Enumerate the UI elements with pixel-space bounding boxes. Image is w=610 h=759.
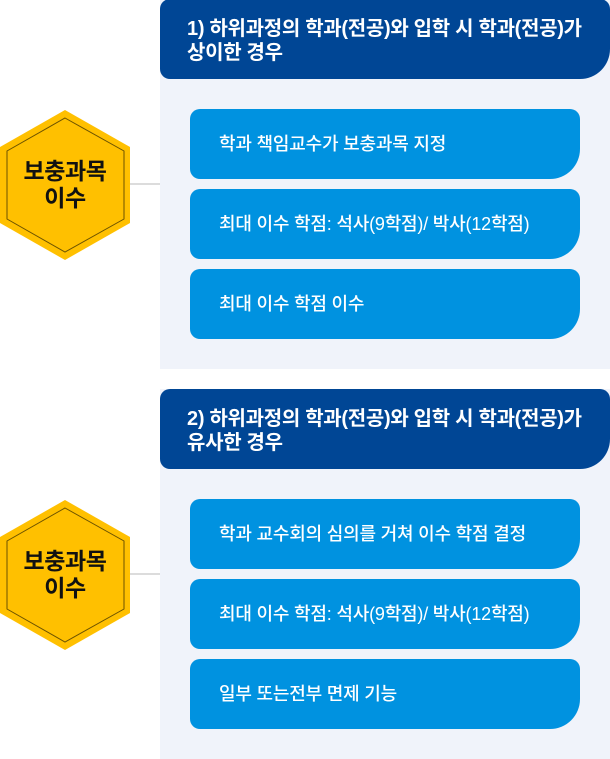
panel: section 2 background — [160, 389, 610, 759]
item: partial or full exemption: 일부 또는전부 면제 기능 — [219, 684, 397, 704]
item: max credit completion: 최대 이수 학점 이수 — [219, 294, 364, 314]
heading: section 1: 1) 하위과정의 학과(전공)와 입학 시 학과(전공)가 — [187, 18, 582, 40]
heading: section 2 — [160, 389, 610, 469]
icon: hexagon badge 2: 이수 — [44, 575, 86, 601]
icon: hexagon badge 1: 보충과목 — [23, 158, 107, 184]
item: max credits: 최대 이수 학점: 석사(9학점)/ 박사(12학점) — [219, 214, 529, 234]
icon: hexagon badge 2: 보충과목 — [23, 548, 107, 574]
item: partial or full exemption — [190, 659, 580, 729]
panel: section 1 background — [160, 0, 610, 369]
heading: section 1 — [160, 0, 610, 79]
item: max credits — [190, 189, 580, 259]
item: department committee — [190, 499, 580, 569]
item: max credits: 최대 이수 학점: 석사(9학점)/ 박사(12학점) — [219, 604, 529, 624]
icon: hexagon badge 1: 이수 — [44, 185, 86, 211]
item: max credits — [190, 579, 580, 649]
connector line 2 — [130, 573, 160, 575]
item: professor designates — [190, 109, 580, 179]
icon: hexagon badge 2 — [0, 500, 130, 650]
item: professor designates: 학과 책임교수가 보충과목 지정 — [219, 134, 446, 154]
heading: section 2: 유사한 경우 — [187, 432, 283, 454]
heading: section 1: 상이한 경우 — [187, 42, 283, 64]
connector line 1 — [130, 183, 160, 185]
item: max credit completion — [190, 269, 580, 339]
heading: section 2: 2) 하위과정의 학과(전공)와 입학 시 학과(전공)가 — [187, 408, 582, 430]
icon: hexagon badge 1 — [0, 110, 130, 260]
item: department committee: 학과 교수회의 심의를 거쳐 이수 학점 결정 — [219, 524, 526, 544]
